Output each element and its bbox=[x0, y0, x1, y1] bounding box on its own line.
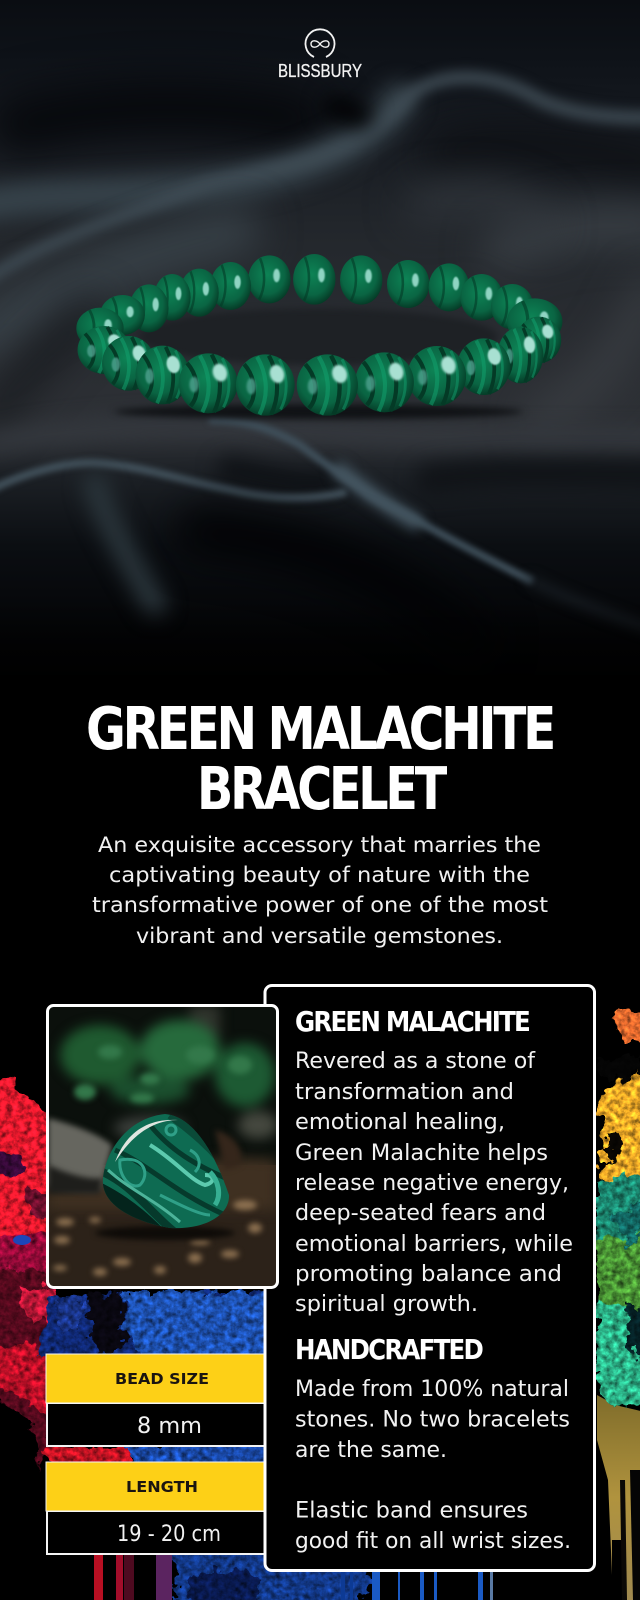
spec table: length: LENGTH bbox=[126, 1478, 198, 1496]
text: stone description: deep-seated fears and bbox=[295, 1201, 546, 1226]
wordmark: BLISSBURY bbox=[278, 61, 362, 81]
panel: product photo of malachite stone bbox=[48, 1005, 278, 1290]
text: handcrafted details: Made from 100% natural bbox=[295, 1377, 569, 1402]
intro paragraph: transformative power of one of the most bbox=[92, 893, 548, 918]
text: stone description bbox=[295, 1049, 573, 1317]
text: handcrafted details bbox=[295, 1377, 571, 1554]
grey pebble bbox=[48, 1118, 112, 1191]
text: handcrafted details: good fit on all wrist sizes. bbox=[295, 1529, 571, 1554]
text: stone description: emotional healing, bbox=[295, 1110, 505, 1135]
intro paragraph: vibrant and versatile gemstones. bbox=[136, 924, 503, 949]
intro paragraph bbox=[92, 833, 548, 949]
heading: green malachite: GREEN MALACHITE bbox=[295, 1006, 529, 1038]
spec table: length bbox=[46, 1462, 265, 1554]
hero photo: black satin fabric background bbox=[0, 0, 640, 700]
speckled ground bbox=[53, 1200, 262, 1276]
title bbox=[86, 694, 553, 823]
text: stone description: emotional barriers, while bbox=[295, 1232, 573, 1257]
text: stone description: promoting balance and bbox=[295, 1262, 562, 1287]
intro paragraph: An exquisite accessory that marries the bbox=[98, 833, 541, 858]
text: stone description: release negative energy, bbox=[295, 1171, 569, 1196]
paint splash: left red and blue bbox=[0, 1078, 275, 1470]
title: GREEN MALACHITE bbox=[86, 694, 553, 763]
text: stone description: transformation and bbox=[295, 1080, 514, 1105]
text: handcrafted details: stones. No two bracelets bbox=[295, 1408, 570, 1432]
bracelet: malachite beads bbox=[76, 254, 562, 419]
panel: description bbox=[265, 986, 594, 1570]
text: stone description: Green Malachite helps bbox=[295, 1141, 548, 1166]
text: handcrafted details: Elastic band ensures bbox=[295, 1498, 528, 1524]
paint splash: right orange, teal, tan bbox=[595, 1012, 640, 1600]
spec table: length: 19 - 20 cm bbox=[117, 1522, 221, 1547]
logo: Blissbury bbox=[278, 29, 362, 81]
text: handcrafted details: are the same. bbox=[295, 1438, 447, 1463]
text: stone description: Revered as a stone of bbox=[295, 1049, 536, 1074]
icon: infinity in circle bbox=[306, 29, 335, 57]
spec table: bead size bbox=[46, 1354, 265, 1446]
spec table: bead size: 8 mm bbox=[137, 1414, 202, 1439]
spec table: bead size: BEAD SIZE bbox=[115, 1370, 209, 1388]
text: stone description: spiritual growth. bbox=[295, 1292, 478, 1317]
paint drips: bottom bbox=[94, 1550, 493, 1600]
heading: handcrafted: HANDCRAFTED bbox=[295, 1334, 483, 1366]
title: BRACELET bbox=[197, 754, 447, 823]
malachite stone bbox=[102, 1114, 229, 1228]
intro paragraph: captivating beauty of nature with the bbox=[109, 863, 530, 888]
